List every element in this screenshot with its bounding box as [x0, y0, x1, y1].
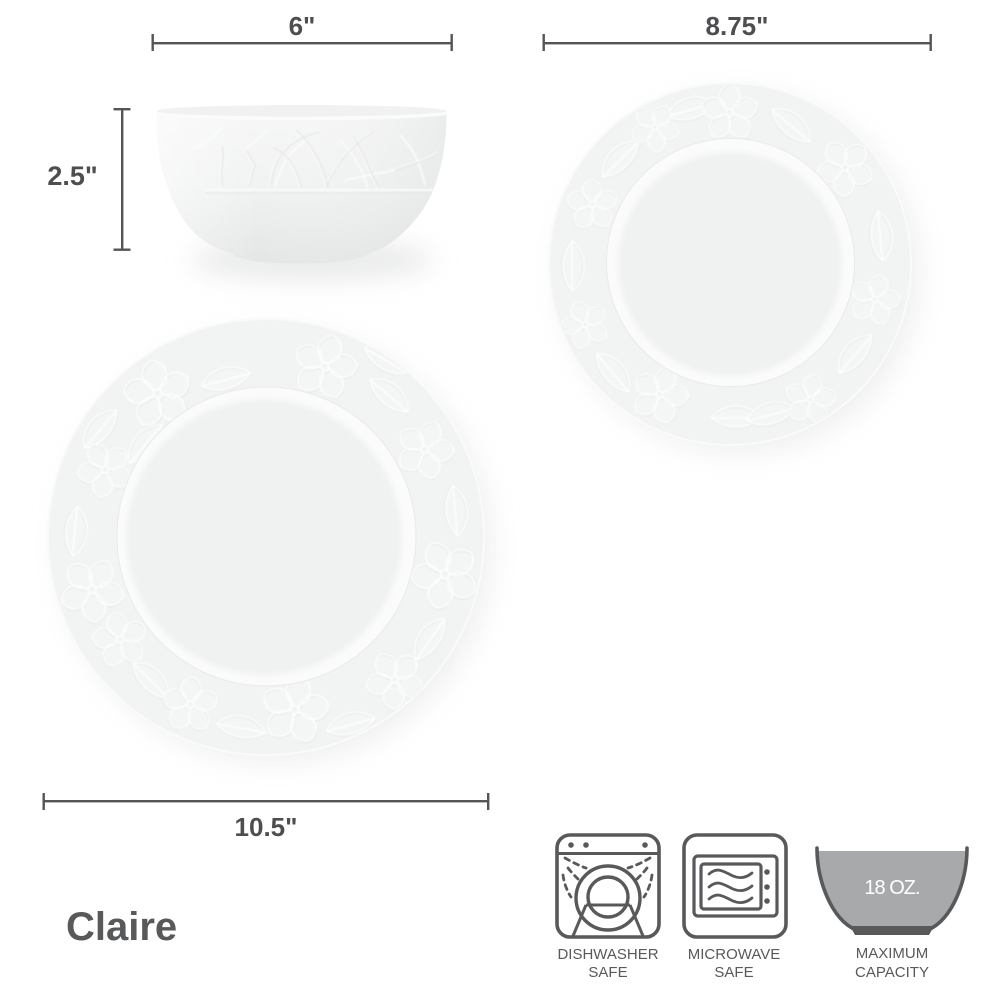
icon: dishwasher safe — [557, 835, 659, 981]
bowl — [156, 105, 446, 280]
small plate well — [618, 152, 842, 376]
icon: dishwasher safe: SAFE — [588, 964, 628, 981]
bowl body — [156, 106, 446, 264]
icon: microwave safe — [684, 835, 786, 981]
small plate shadow — [562, 95, 918, 451]
capacity value: 18 OZ. — [864, 877, 920, 899]
bowl shadow — [190, 240, 434, 280]
large plate shadow — [62, 333, 490, 761]
small plate — [548, 82, 918, 451]
small plate floral relief — [570, 98, 888, 422]
bowl embossed band — [190, 125, 437, 193]
large plate rim — [47, 318, 485, 756]
large plate — [45, 318, 495, 761]
capacity label: MAXIMUM — [856, 945, 928, 962]
dimension: small plate width 8.75 inches: 8.75" — [706, 11, 768, 41]
large plate inner ring — [117, 387, 416, 686]
dimension: bowl height 2.5 inches: 2.5" — [47, 161, 98, 191]
product name: Claire — [66, 905, 177, 949]
dimension: bowl width 6 inches: 6" — [289, 11, 315, 41]
bowl rim — [156, 105, 446, 117]
microwave label: MICROWAVE — [688, 946, 780, 963]
dishwasher label: DISHWASHER — [557, 946, 659, 963]
dimension: large plate width 10.5 inches: 10.5" — [235, 812, 297, 842]
large plate floral relief — [62, 340, 475, 736]
small plate inner ring — [606, 138, 854, 386]
large plate well — [126, 399, 402, 675]
icon: microwave safe: SAFE — [714, 964, 754, 981]
small plate rim — [548, 82, 912, 446]
icon: bowl capacity — [817, 848, 967, 981]
icon: bowl capacity: CAPACITY — [855, 964, 929, 981]
